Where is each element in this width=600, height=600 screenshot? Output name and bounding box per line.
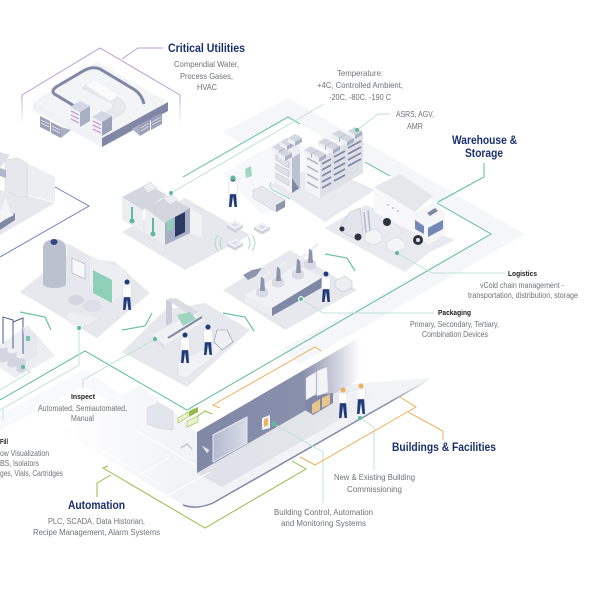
text: logistics: Logistics [508, 269, 537, 278]
text: fill: ges, Vials, Cartridges [0, 469, 63, 478]
tank and filling line [43, 239, 132, 330]
text: temperature [317, 69, 403, 102]
mobile robots [215, 220, 270, 251]
text: fill [0, 437, 63, 478]
chevrons [20, 254, 355, 331]
warehouse floor [0, 98, 525, 430]
roof units [143, 182, 157, 193]
pale leader lines [0, 104, 505, 503]
title: critical utilities: Process Gases, [180, 72, 233, 81]
title: warehouse and storage [452, 135, 517, 160]
text: asrs: ASRS, AGV, [396, 110, 434, 119]
conveyor loop [53, 68, 144, 107]
text: fill: Fill [0, 437, 8, 446]
automation equipment [147, 403, 209, 453]
text: inspect [38, 392, 127, 423]
forklift and boxes [340, 208, 405, 255]
rack cluster right [304, 127, 363, 198]
text: building control: and Monitoring Systems [281, 519, 366, 528]
blue outline [0, 187, 89, 257]
text: commissioning [334, 473, 415, 494]
title: automation: Automation [68, 500, 125, 512]
building cabinets [305, 367, 333, 415]
text: packaging: Packaging [438, 308, 471, 317]
text: temperature: -20C, -80C, -190 C [329, 93, 391, 102]
text: temperature: +4C, Controlled Ambient, [317, 81, 403, 90]
racks [270, 127, 363, 199]
critical utilities purple outline [22, 48, 180, 125]
text: fill: ow Visualization [0, 449, 49, 458]
title: automation: PLC, SCADA, Data Historian, [48, 517, 145, 526]
text: fill: BS, Isolators [0, 459, 39, 468]
title: critical utilities: Critical Utilities [168, 43, 245, 55]
title: warehouse and storage: Warehouse & [452, 135, 517, 147]
truck [374, 174, 445, 245]
buildings orange outline [213, 347, 443, 465]
text: packaging [410, 308, 499, 339]
fill tanks [0, 317, 37, 372]
text: logistics [468, 269, 578, 300]
title: buildings and facilities: Buildings & Facilities [392, 442, 496, 454]
title: automation [33, 500, 160, 537]
vents [40, 113, 162, 138]
wall device [262, 415, 276, 430]
text: inspect: Automated, Semiautomated, [38, 404, 127, 413]
title: warehouse and storage: Storage [465, 148, 503, 160]
text: asrs: AMR [407, 122, 423, 131]
thermometers [131, 207, 133, 220]
title: automation: Recipe Management, Alarm Systems [33, 528, 160, 537]
building floor [60, 378, 432, 508]
text: inspect: Manual [71, 414, 94, 423]
door [175, 212, 185, 237]
purple units [70, 101, 112, 136]
text: commissioning: Commissioning [347, 485, 402, 494]
automation green outline [97, 411, 306, 528]
text: logistics: vCold chain management - [480, 281, 564, 290]
text: commissioning: New & Existing Building [334, 473, 415, 482]
text: asrs [396, 110, 434, 131]
warehouse teal outline [0, 117, 491, 410]
text: temperature: Temperature: [337, 69, 383, 78]
rack cluster left [272, 134, 302, 193]
building wall [190, 337, 360, 473]
facility workers [338, 384, 366, 420]
text: packaging: Combination Devices [422, 330, 488, 339]
cold room [122, 182, 202, 245]
upper left room [0, 152, 55, 230]
glass door [213, 417, 247, 462]
connector lines [0, 48, 505, 528]
text: logistics: transportation, distribution, storage [468, 291, 578, 300]
text: packaging: Primary, Secondary, Tertiary, [410, 320, 499, 329]
title: critical utilities: Compendial Water, [174, 60, 239, 69]
inspection station [153, 298, 233, 378]
title: critical utilities: HVAC [197, 83, 217, 92]
pads [0, 165, 455, 387]
critical utilities building [33, 62, 168, 147]
tray stack [82, 82, 125, 122]
packaging robots [243, 243, 352, 316]
warehouse worker and workstation [228, 166, 285, 212]
text: building control: Building Control, Automation [274, 508, 373, 517]
title: critical utilities [168, 43, 245, 92]
text: inspect: Inspect [71, 392, 95, 401]
text: building control [274, 508, 373, 528]
